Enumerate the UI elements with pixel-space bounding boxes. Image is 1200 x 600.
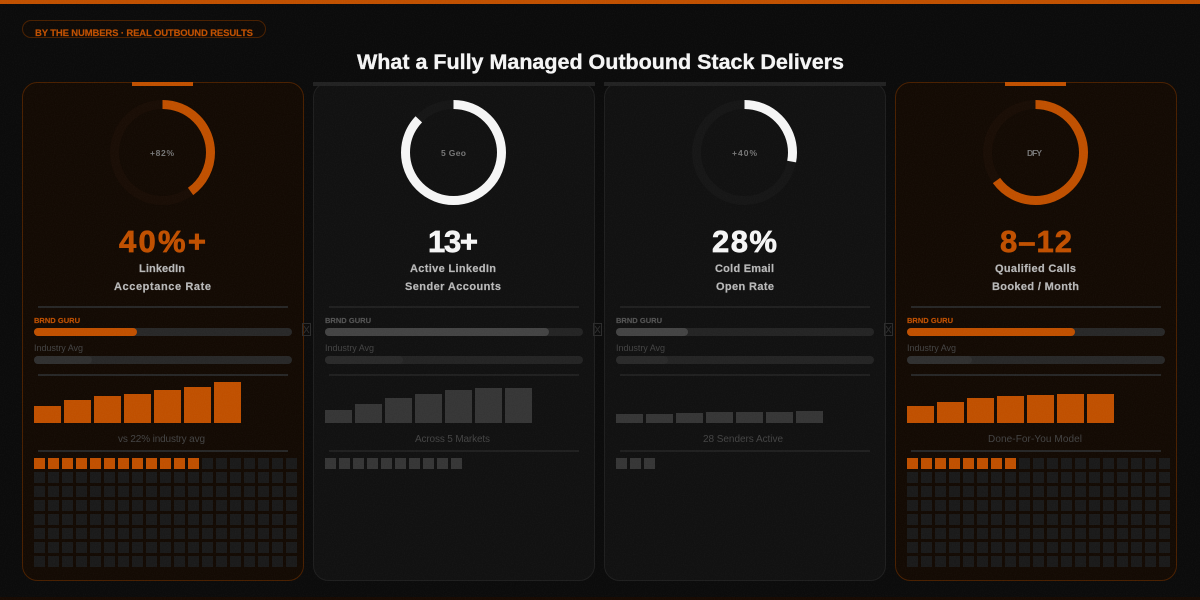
ring gauge: 87% xyxy=(406,104,502,200)
comparison bars: BRND GURU xyxy=(907,316,953,325)
waffle row xyxy=(616,458,655,469)
ring gauge: 40%: +82% xyxy=(150,148,174,158)
ring gauge: 65% xyxy=(988,104,1084,200)
mini bar chart xyxy=(616,411,823,423)
stat label: Booked / Month xyxy=(992,281,1079,293)
stat: 40%+: 40%+ xyxy=(119,224,206,259)
comparison bars: Industry Avg xyxy=(907,343,956,353)
stat label: Qualified Calls xyxy=(995,263,1076,275)
stat label xyxy=(992,263,1079,293)
ring gauge: 28% xyxy=(696,104,792,200)
caption: Done-For-You Model xyxy=(988,434,1082,445)
top accent bar xyxy=(0,0,1200,4)
stat label: Cold Email xyxy=(715,263,774,275)
mini bar chart xyxy=(325,388,532,423)
stat label: Open Rate xyxy=(716,281,774,293)
comparison bars: Industry Avg xyxy=(325,343,374,353)
mini bar chart xyxy=(907,394,1114,423)
stat: 28%: 28% xyxy=(712,224,777,259)
eyebrow pill xyxy=(22,20,266,39)
comparison bars xyxy=(325,316,583,364)
stat label: Active LinkedIn xyxy=(410,263,496,275)
comparison bars: BRND GURU xyxy=(34,316,80,325)
waffle row xyxy=(325,458,462,469)
stat label: LinkedIn xyxy=(139,263,185,275)
panel: cold email open rate xyxy=(604,82,886,580)
comparison bars xyxy=(616,316,874,364)
panel: qualified calls booked per month xyxy=(896,82,1176,580)
mini bar chart xyxy=(34,382,241,423)
panel: LinkedIn acceptance rate xyxy=(22,82,304,580)
stat label xyxy=(114,263,211,293)
panel: active LinkedIn sender accounts xyxy=(313,82,595,580)
ring gauge: 87%: 5 Geo xyxy=(441,148,466,158)
title: What a Fully Managed Outbound Stack Delivers xyxy=(357,50,844,74)
comparison bars xyxy=(34,316,292,364)
caption: 28 Senders Active xyxy=(703,434,783,445)
comparison bars: BRND GURU xyxy=(616,316,662,325)
eyebrow pill: BY THE NUMBERS · REAL OUTBOUND RESULTS xyxy=(35,28,253,39)
ring gauge: 65%: DFY xyxy=(1027,148,1042,158)
connector glyph 1 xyxy=(302,324,310,336)
caption: vs 22% industry avg xyxy=(118,434,205,445)
ring gauge: 28%: +40% xyxy=(732,148,757,158)
connector glyph 2 xyxy=(594,324,602,336)
comparison bars: BRND GURU xyxy=(325,316,371,325)
stat label xyxy=(405,263,501,293)
stat label xyxy=(715,263,774,293)
stat label: Acceptance Rate xyxy=(114,281,211,293)
caption: Across 5 Markets xyxy=(415,434,490,445)
comparison bars xyxy=(907,316,1165,364)
comparison bars: Industry Avg xyxy=(616,343,665,353)
waffle grid xyxy=(907,458,1170,567)
stat: 13+: 13+ xyxy=(428,224,478,259)
ring gauge: 40% xyxy=(114,104,210,200)
waffle grid xyxy=(34,458,297,567)
stat label: Sender Accounts xyxy=(405,281,501,293)
connector glyph 3 xyxy=(884,324,892,336)
stat: 8–12: 8–12 xyxy=(1000,224,1072,259)
comparison bars: Industry Avg xyxy=(34,343,83,353)
